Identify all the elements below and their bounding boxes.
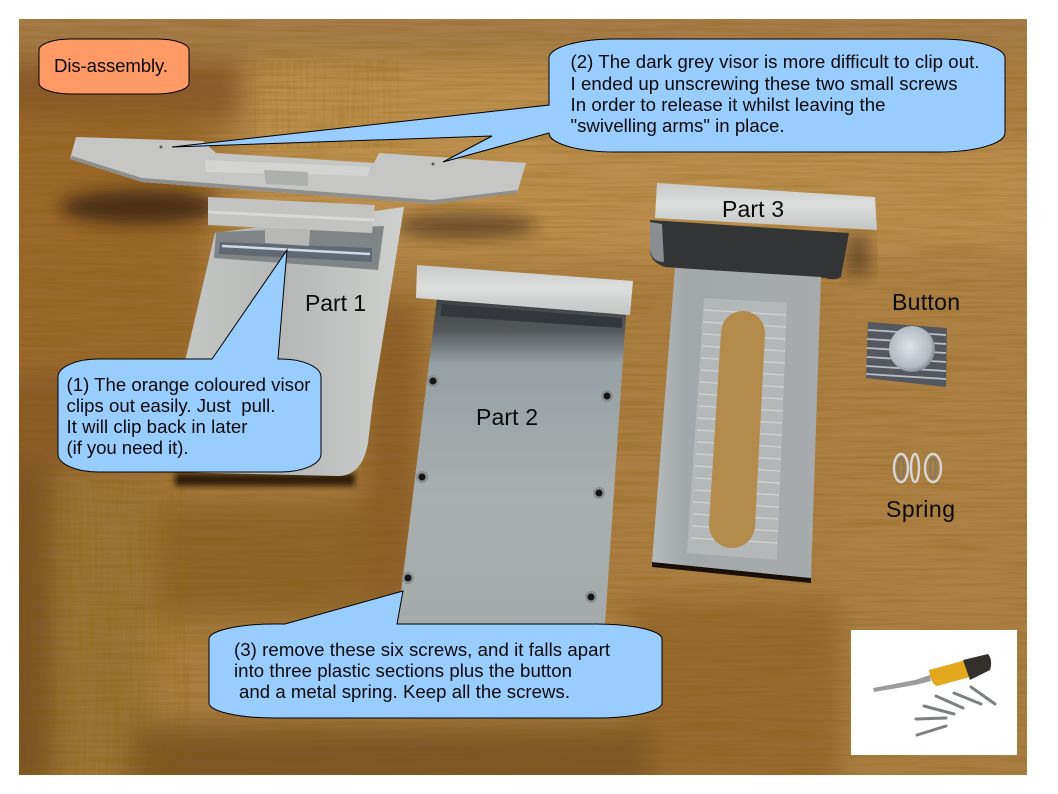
- callout: (3) remove six screws: into three plastic sections plus the button: [234, 660, 572, 681]
- dark grey visor with two small screws: [70, 137, 526, 204]
- callout: (2) dark grey visor: "swivelling arms" in place.: [570, 115, 784, 136]
- callout: (1) orange coloured visor: [58, 250, 321, 472]
- callout: (3) remove six screws: (3) remove these six screws, and it falls apart: [234, 639, 611, 660]
- title box: Dis-assembly: [39, 39, 189, 94]
- callout: (2) dark grey visor: [172, 39, 1005, 162]
- label: Part 2: Part 2: [476, 404, 538, 430]
- callout: (1) orange coloured visor: It will clip back in later: [66, 416, 248, 437]
- inset photo: screwdriver and bits: [851, 630, 1017, 755]
- callout: (1) orange coloured visor: (1) The orange coloured visor: [66, 374, 310, 395]
- callout: (3) remove six screws: [209, 591, 662, 718]
- spring: [894, 454, 941, 482]
- label: Button: Button: [892, 289, 960, 315]
- part 3: grey plastic section with slot: [650, 183, 877, 578]
- callout: (1) orange coloured visor: (if you need it).: [66, 437, 188, 458]
- callout: (2) dark grey visor: In order to release it whilst leaving the: [570, 94, 886, 115]
- part 2: grey plastic section with six screw holes: [397, 265, 633, 625]
- callout: (2) dark grey visor: I ended up unscrewing these two small screws: [570, 73, 958, 94]
- button: metal plate with round cap: [866, 322, 947, 387]
- label: Part 1: Part 1: [305, 290, 366, 316]
- label: Spring: Spring: [886, 496, 955, 522]
- callout: (2) dark grey visor: (2) The dark grey visor is more difficult to clip out.: [570, 51, 980, 72]
- callout: (3) remove six screws: and a metal spring. Keep all the screws.: [239, 681, 570, 702]
- title box: Dis-assembly: Dis-assembly.: [54, 55, 168, 76]
- shadows under the parts: [60, 190, 870, 583]
- part 1: grey plastic section with hinge: [170, 197, 404, 476]
- callout: (1) orange coloured visor: clips out easily. Just pull.: [66, 395, 276, 416]
- label: Part 3: Part 3: [722, 196, 784, 222]
